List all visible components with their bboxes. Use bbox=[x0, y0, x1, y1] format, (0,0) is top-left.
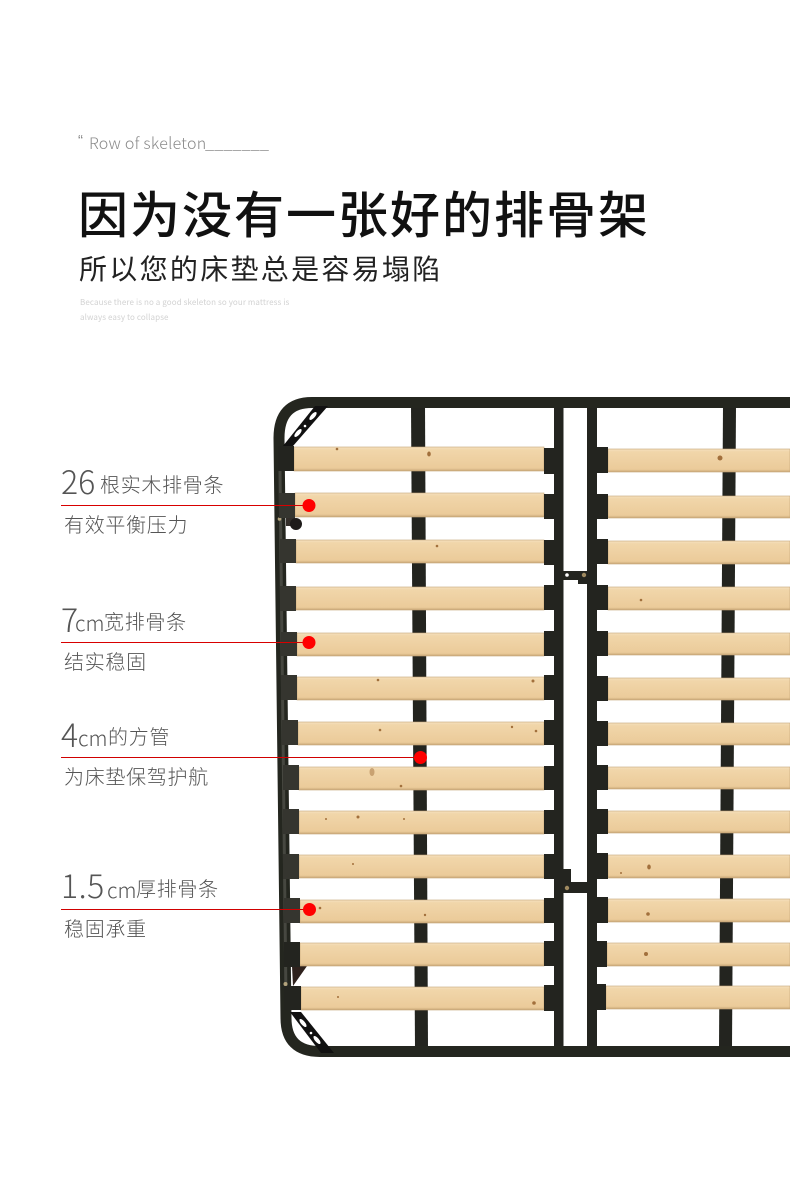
eyebrow label bbox=[78, 130, 269, 154]
corner brace: bottom left bbox=[290, 1012, 334, 1053]
title: 因为没有一张好的排骨架 bbox=[78, 176, 650, 248]
callout: 1.5cm thick: 1.5 bbox=[61, 862, 105, 908]
callout: 7cm slats: 宽排骨条 bbox=[104, 606, 187, 635]
left rail highlight bbox=[280, 470, 286, 1000]
callout: 4cm tube: cm bbox=[78, 723, 107, 753]
callout: 7cm slats: 结实稳固 bbox=[64, 646, 147, 675]
callout: 1.5cm thick: 厚排骨条 bbox=[136, 873, 219, 902]
eyebrow label: “ bbox=[78, 132, 83, 149]
callout: 4cm tube bbox=[61, 711, 427, 790]
leader line with red dot bbox=[61, 499, 316, 512]
subtitle: 所以您的床垫总是容易塌陷 bbox=[79, 248, 443, 288]
callout: 1.5cm thick: 稳固承重 bbox=[64, 913, 147, 942]
callout: 4cm tube: 的方管 bbox=[108, 721, 170, 750]
small angle bracket bbox=[292, 966, 307, 986]
outer metal frame bbox=[279, 402, 790, 1052]
vertical support: right half bbox=[719, 405, 736, 1048]
centre rails bbox=[554, 405, 597, 1047]
leader line with red dot bbox=[61, 903, 316, 916]
wood knots bbox=[319, 448, 722, 1005]
callout: 26 slats: 26 bbox=[61, 458, 95, 504]
english description bbox=[80, 297, 290, 323]
english description: Because there is no a good skeleton so your mattress is bbox=[80, 297, 290, 308]
callout: 7cm slats bbox=[61, 596, 316, 675]
centre clips, right side bbox=[590, 447, 608, 1010]
left slats bbox=[294, 447, 544, 1010]
leader line with red dot bbox=[61, 751, 427, 764]
callout: 26 slats: 根实木排骨条 bbox=[100, 469, 224, 498]
left clips bbox=[278, 446, 301, 1010]
eyebrow label: _______ bbox=[205, 130, 269, 154]
eyebrow label: Row of skeleton bbox=[89, 130, 206, 154]
corner brace: top left bbox=[283, 406, 328, 446]
callout: 4cm tube: 4 bbox=[61, 711, 78, 757]
leader line with red dot bbox=[61, 636, 316, 649]
right slats bbox=[606, 449, 790, 1009]
handle fitting bbox=[278, 517, 302, 530]
bed frame bbox=[278, 402, 790, 1053]
callout: 7cm slats: cm bbox=[75, 608, 104, 638]
centre clips, left side bbox=[544, 448, 560, 1011]
callout: 26 slats bbox=[61, 458, 316, 538]
callout: 1.5cm thick bbox=[61, 862, 316, 942]
vertical support: left half bbox=[411, 405, 428, 1048]
callout: 4cm tube: 为床垫保驾护航 bbox=[64, 761, 209, 790]
callout: 26 slats: 有效平衡压力 bbox=[64, 509, 188, 538]
english description: always easy to collapse bbox=[80, 312, 169, 323]
callout: 7cm slats: 7 bbox=[61, 596, 78, 642]
callout: 1.5cm thick: cm bbox=[107, 875, 136, 905]
